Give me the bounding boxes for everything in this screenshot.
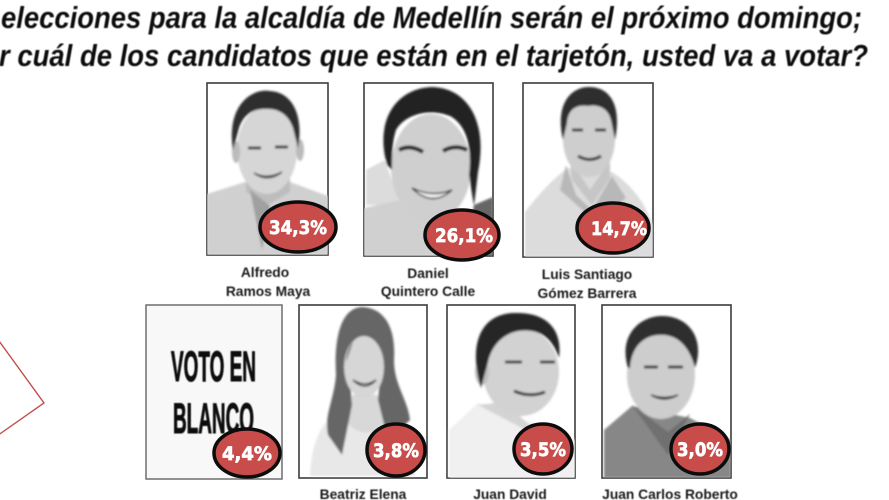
badge: 4,4%: 4,4% <box>222 443 272 465</box>
badge: 4,4% <box>214 429 280 477</box>
badge: 26,1%: 26,1% <box>435 225 493 247</box>
label: Voto en blanco <box>171 343 256 443</box>
panel: Voto en blanco: BLANCO <box>173 395 254 443</box>
title: survey question <box>0 0 868 73</box>
badge: 3,8% <box>367 424 425 476</box>
badge: 3,5% <box>514 424 572 474</box>
panel: Juan David <box>447 305 575 500</box>
panel: Voto en blanco: VOTO EN <box>171 343 256 391</box>
name: Alfredo Ramos Maya: Alfredo <box>241 265 289 280</box>
panel: Daniel Quintero Calle <box>364 83 499 299</box>
badge: 34,3%: 34,3% <box>269 217 327 239</box>
decorative red diamond outline <box>0 334 44 438</box>
name: Luis Santiago Gómez Barrera <box>538 267 637 301</box>
panel: Luis Santiago Gómez Barrera <box>523 83 653 301</box>
photo: Juan David <box>449 313 575 478</box>
badge: 34,3% <box>260 202 336 252</box>
badge: 3,5%: 3,5% <box>520 439 566 461</box>
badge: 3,0% <box>671 424 729 474</box>
photo: Daniel Quintero Calle <box>364 87 493 256</box>
name: Luis Santiago Gómez Barrera: Luis Santiago <box>542 267 632 282</box>
name: Luis Santiago Gómez Barrera: Gómez Barrera <box>538 286 637 301</box>
photo: Alfredo Ramos Maya <box>207 91 328 255</box>
photo: Beatriz Elena <box>310 307 415 476</box>
name: Alfredo Ramos Maya: Ramos Maya <box>226 284 310 299</box>
name: Daniel Quintero Calle <box>381 266 475 299</box>
badge: 14,7%: 14,7% <box>591 218 647 240</box>
panel: Alfredo Ramos Maya <box>207 83 336 299</box>
name: Daniel Quintero Calle: Quintero Calle <box>381 284 475 299</box>
panel: Voto en blanco <box>146 305 282 479</box>
name: Daniel Quintero Calle: Daniel <box>407 266 449 281</box>
badge: 3,0%: 3,0% <box>677 439 723 461</box>
badge: 3,8%: 3,8% <box>373 440 419 462</box>
panel: Beatriz Elena <box>299 305 427 500</box>
photo: Luis Santiago Gómez Barrera <box>525 87 653 257</box>
badge: 14,7% <box>577 203 649 253</box>
name: Alfredo Ramos Maya <box>226 265 310 299</box>
badge: 26,1% <box>425 210 499 260</box>
panel: Juan Carlos Roberto <box>602 305 738 500</box>
photo: Juan Carlos Roberto <box>604 316 731 478</box>
